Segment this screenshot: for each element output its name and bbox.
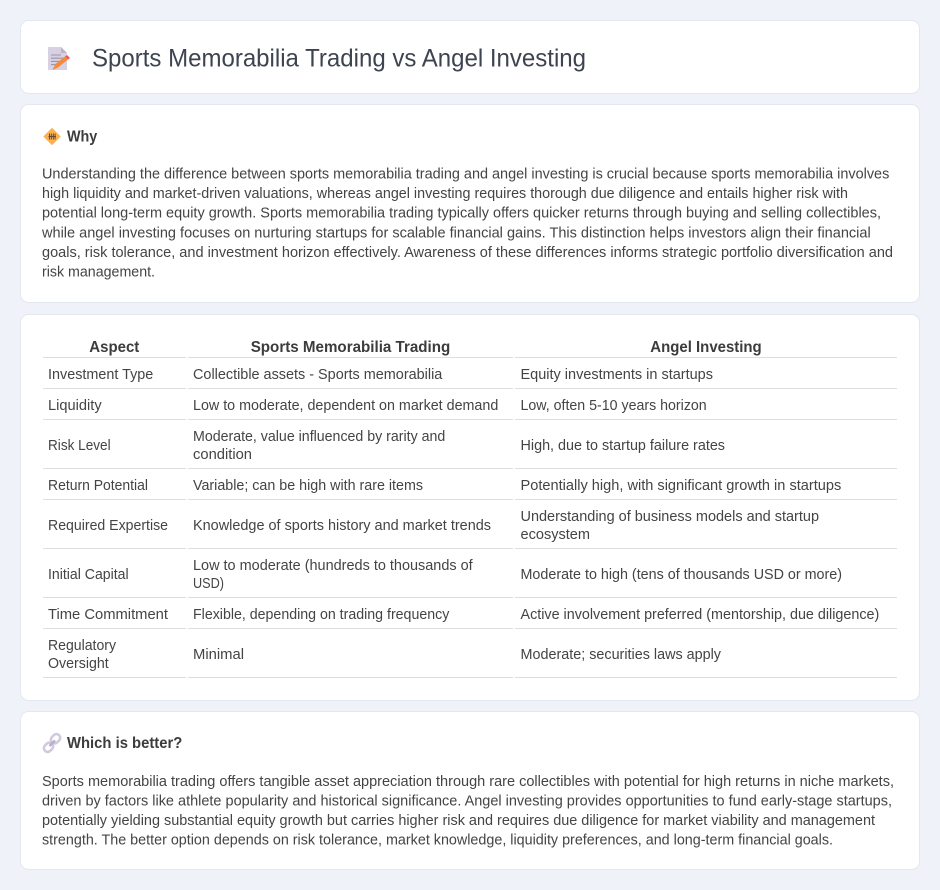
row: return potential: Variable; can be high with rare items	[193, 478, 423, 494]
panel: which is better	[20, 712, 920, 870]
text block: why paragraph: risk management.	[42, 264, 155, 280]
table header row: Sports Memorabilia Trading	[251, 339, 450, 356]
table header row	[89, 339, 762, 356]
row: time commitment: Flexible, depending on trading frequency	[193, 607, 450, 623]
row: time commitment	[48, 607, 879, 623]
panel: why	[20, 104, 920, 302]
row: investment type: Collectible assets - Sports memorabilia	[193, 367, 442, 383]
table header row: Angel Investing	[650, 339, 762, 356]
row: return potential	[48, 478, 841, 494]
row: required expertise: ecosystem	[520, 527, 590, 543]
icon: orange diamond	[44, 128, 60, 144]
row: return potential: Potentially high, with significant growth in startups	[520, 478, 841, 494]
icon: memo with pencil	[48, 47, 70, 70]
row: investment type: Equity investments in startups	[520, 367, 713, 383]
row: regulatory oversight	[48, 638, 722, 672]
row: return potential: Return Potential	[48, 478, 148, 494]
panel: comparison table	[20, 314, 920, 700]
row: regulatory oversight: Minimal	[193, 647, 244, 663]
row: regulatory oversight: Regulatory	[48, 638, 117, 654]
row: initial capital: Moderate to high (tens of thousands USD or more)	[520, 567, 842, 583]
row: risk level: High, due to startup failure rates	[520, 438, 725, 454]
row: liquidity: Low to moderate, dependent on market demand	[193, 398, 498, 414]
row: time commitment: Time Commitment	[48, 607, 168, 623]
row: risk level: Moderate, value influenced by rarity and	[193, 429, 445, 445]
text block: which is better paragraph	[42, 774, 894, 848]
panel: header	[20, 20, 920, 94]
text block: why paragraph: high liquidity and market-driven valuations, whereas angel investing requires thorough due diligence and entails higher risk with	[42, 186, 848, 202]
row: time commitment: Active involvement preferred (mentorship, due diligence)	[520, 607, 879, 623]
row: initial capital	[48, 558, 842, 592]
row: required expertise	[48, 509, 819, 543]
row: regulatory oversight: Moderate; securities laws apply	[520, 647, 722, 663]
heading: why: Why	[67, 129, 97, 146]
text block: which is better paragraph: strength. The better option depends on risk tolerance, market knowledge, liquidity preferences, and long-term financial goals.	[42, 832, 833, 848]
row: risk level	[48, 429, 725, 463]
row: initial capital: USD)	[193, 576, 224, 592]
table header row: Aspect	[89, 339, 140, 356]
row: risk level: condition	[193, 447, 252, 463]
text block: which is better paragraph: driven by factors like athlete popularity and historical significance. Angel investing provides opportunities to fund early-stage startups,	[42, 793, 892, 809]
text block: which is better paragraph: potentially yielding substantial equity growth but carries higher risk and requires due diligence for market viability and management	[42, 813, 875, 829]
text block: why paragraph: while angel investing focuses on nurturing startups for scalable financial gains. This distinction helps investors align their financial	[41, 225, 871, 241]
text block: why paragraph: Understanding the difference between sports memorabilia trading and angel investing is crucial because sports memorabilia involves	[42, 166, 889, 182]
row: liquidity: Liquidity	[48, 398, 103, 414]
text block: why paragraph	[41, 166, 893, 280]
row: investment type	[48, 367, 713, 383]
icon: chain link	[42, 733, 62, 753]
title: Sports Memorabilia Trading vs Angel Investing	[92, 44, 586, 72]
row: regulatory oversight: Oversight	[48, 656, 109, 672]
row: initial capital: Low to moderate (hundreds to thousands of	[193, 558, 474, 574]
heading: which is better: Which is better?	[67, 735, 182, 752]
text block: why paragraph: goals, risk tolerance, and investment horizon effectively. Awareness of these differences informs strategic portfolio diversification and	[42, 245, 893, 261]
row: liquidity	[48, 398, 707, 414]
row: initial capital: Initial Capital	[48, 567, 129, 583]
row: investment type: Investment Type	[48, 367, 153, 383]
row: required expertise: Knowledge of sports history and market trends	[193, 518, 491, 534]
text block: why paragraph: potential long-term equity growth. Sports memorabilia trading typically offers quicker returns through buying and selling collectibles,	[42, 206, 881, 222]
row: required expertise: Understanding of business models and startup	[520, 509, 819, 525]
row: risk level: Risk Level	[48, 438, 111, 454]
row: required expertise: Required Expertise	[48, 518, 168, 534]
text block: which is better paragraph: Sports memorabilia trading offers tangible asset appreciation through rare collectibles with potential for high returns in niche markets,	[42, 774, 894, 790]
row: liquidity: Low, often 5-10 years horizon	[520, 398, 707, 414]
